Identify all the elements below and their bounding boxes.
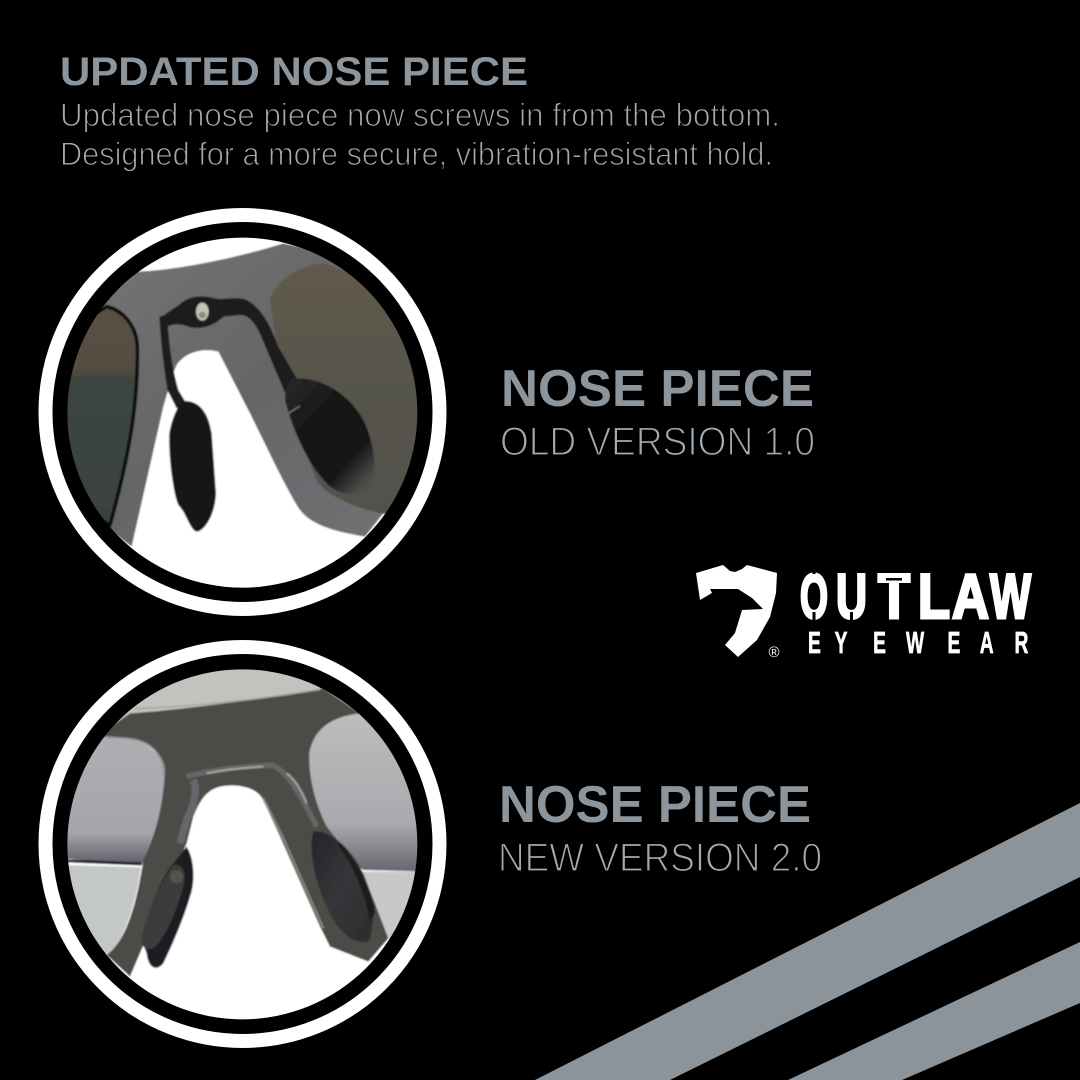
logo: Outlaw Eyewear: W [990,562,1031,632]
decorative diagonal stripes [535,803,1080,1080]
logo: Outlaw Eyewear: T [878,562,910,632]
description text: Designed for a more secure, vibration-resistant hold. [60,136,773,172]
old version label: NOSE PIECE [501,360,814,418]
panel: new version nose piece photo [46,647,440,1041]
logo: Outlaw Eyewear: U [836,562,867,632]
title: UPDATED NOSE PIECE [60,50,528,94]
old version label: OLD VERSION 1.0 [500,420,815,464]
logo: Outlaw Eyewear: L [918,562,950,632]
logo: Outlaw Eyewear: A [952,562,989,632]
logo: Outlaw Eyewear: EYEWEAR [808,627,1029,660]
old version label [500,360,815,464]
logo: Outlaw Eyewear: O [800,562,828,632]
logo: Outlaw Eyewear: ® [768,644,780,661]
logo: Outlaw Eyewear [696,562,1031,661]
description text [60,97,780,172]
new version label: NEW VERSION 2.0 [498,836,822,880]
new version label: NOSE PIECE [499,776,811,834]
description text: Updated nose piece now screws in from the bottom. [60,97,780,133]
panel: old version nose piece photo [46,215,440,609]
new version label [498,776,822,880]
